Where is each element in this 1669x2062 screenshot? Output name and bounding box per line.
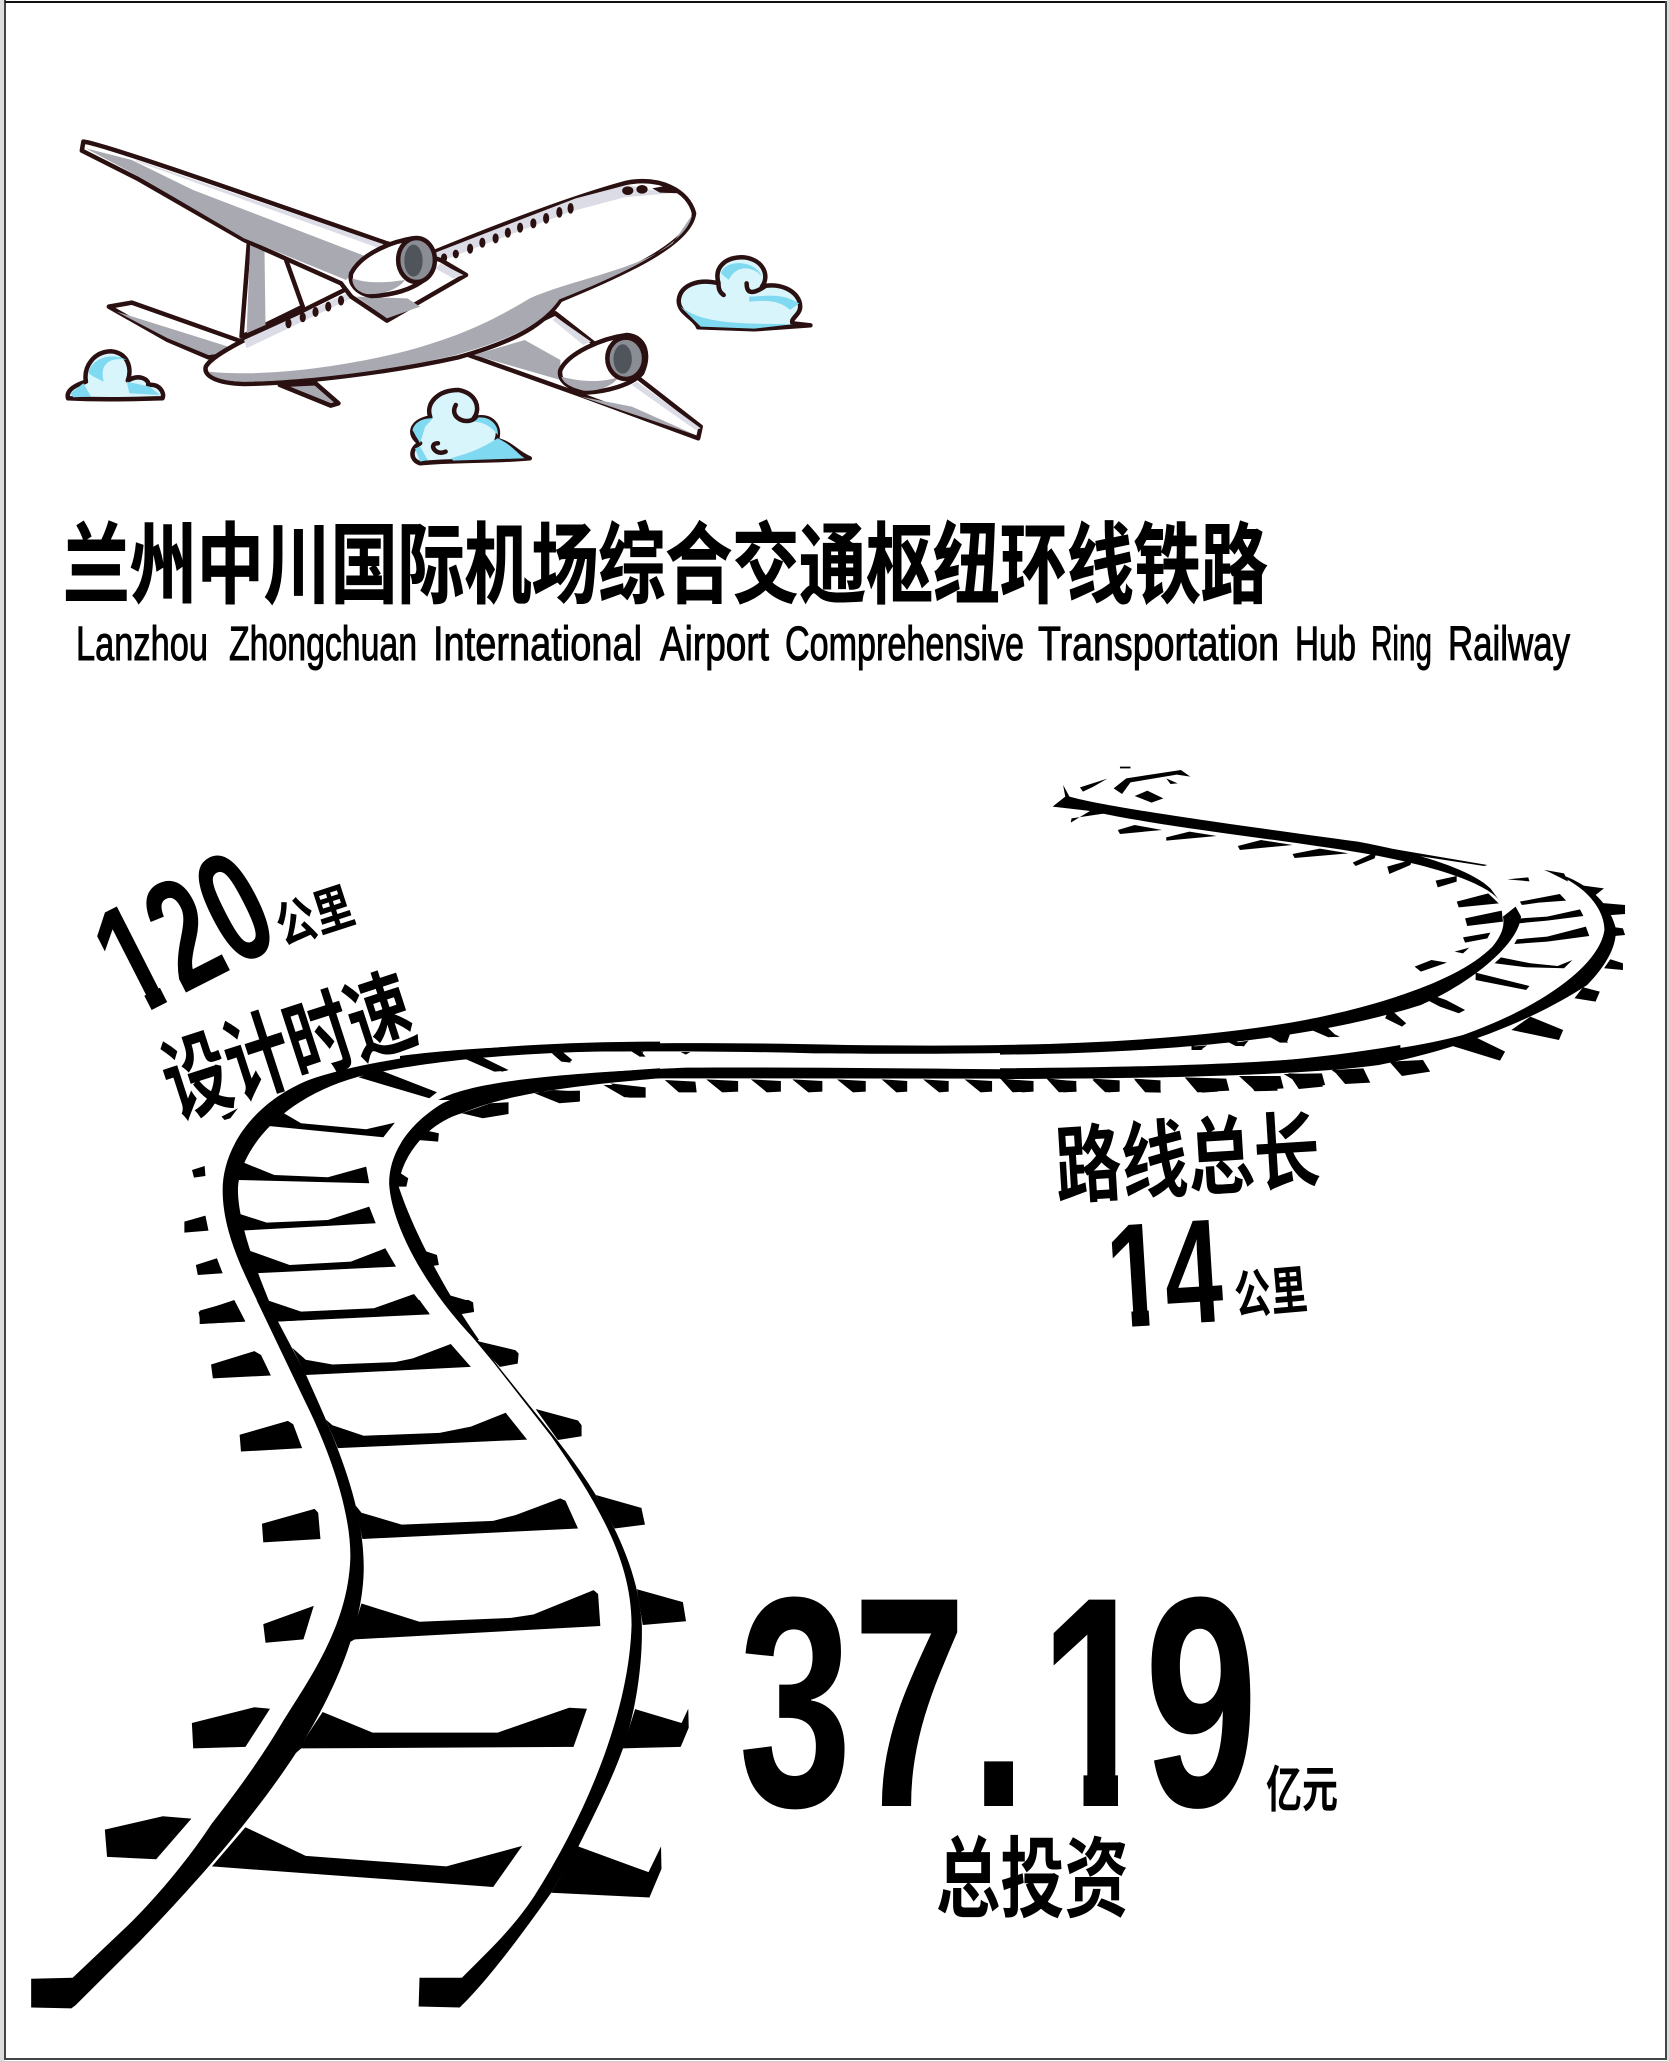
label: total investment: 总投资 — [936, 1831, 1129, 1929]
subtitle — [76, 618, 1570, 671]
icon: bottom cloud — [412, 390, 530, 463]
main wing — [82, 142, 466, 321]
number: 14: 14 — [1102, 1188, 1227, 1360]
near engine — [351, 238, 434, 296]
fuselage — [206, 181, 694, 384]
title: 兰州中川国际机场综合交通枢纽环线铁路 — [63, 516, 1268, 615]
label: design speed: 设计时速 — [150, 959, 427, 1137]
windows — [285, 185, 680, 328]
subtitle: Airport — [660, 618, 769, 671]
label: total route length: 路线总长 — [1052, 1105, 1323, 1216]
unit: kilometres: 公里 — [269, 877, 361, 956]
icon: right cloud — [679, 257, 810, 329]
railway track — [31, 767, 1625, 2008]
vertical fin — [242, 238, 303, 337]
stat: total investment 3.719 billion yuan — [738, 1536, 1338, 1929]
subtitle: Ring — [1371, 618, 1432, 671]
number: 37.19: 37.19 — [738, 1536, 1258, 1870]
subtitle: Railway — [1448, 618, 1570, 671]
stat: route length 14 km — [1052, 1105, 1323, 1360]
icon: left cloud — [68, 351, 163, 399]
subtitle: Hub — [1295, 618, 1356, 671]
number: 120: 120 — [68, 817, 300, 1050]
subtitle: International — [433, 618, 642, 671]
far wing and small tail — [280, 383, 338, 406]
unit: kilometres: 公里 — [1232, 1260, 1310, 1326]
unit: 100 million yuan: 亿元 — [1266, 1763, 1338, 1818]
subtitle: Lanzhou — [76, 618, 208, 671]
track: far curve — [1000, 767, 1625, 1093]
tail plane — [109, 303, 247, 357]
number: 14 — [1100, 1188, 1227, 1360]
track: foreground section with sleepers — [31, 1300, 689, 2008]
subtitle: Zhongchuan — [229, 618, 417, 671]
track: long straight section — [400, 1000, 1400, 1102]
subtitle: Transportation — [1038, 618, 1279, 671]
far engine — [560, 335, 646, 393]
illustration: airplane and clouds — [68, 142, 810, 463]
icon: airplane — [82, 142, 701, 438]
stat: design speed 120 km/h — [65, 817, 427, 1137]
track: hairpin bend at upper left — [184, 1042, 660, 1340]
subtitle: Comprehensive — [785, 618, 1024, 671]
number: 120 — [65, 817, 300, 1052]
